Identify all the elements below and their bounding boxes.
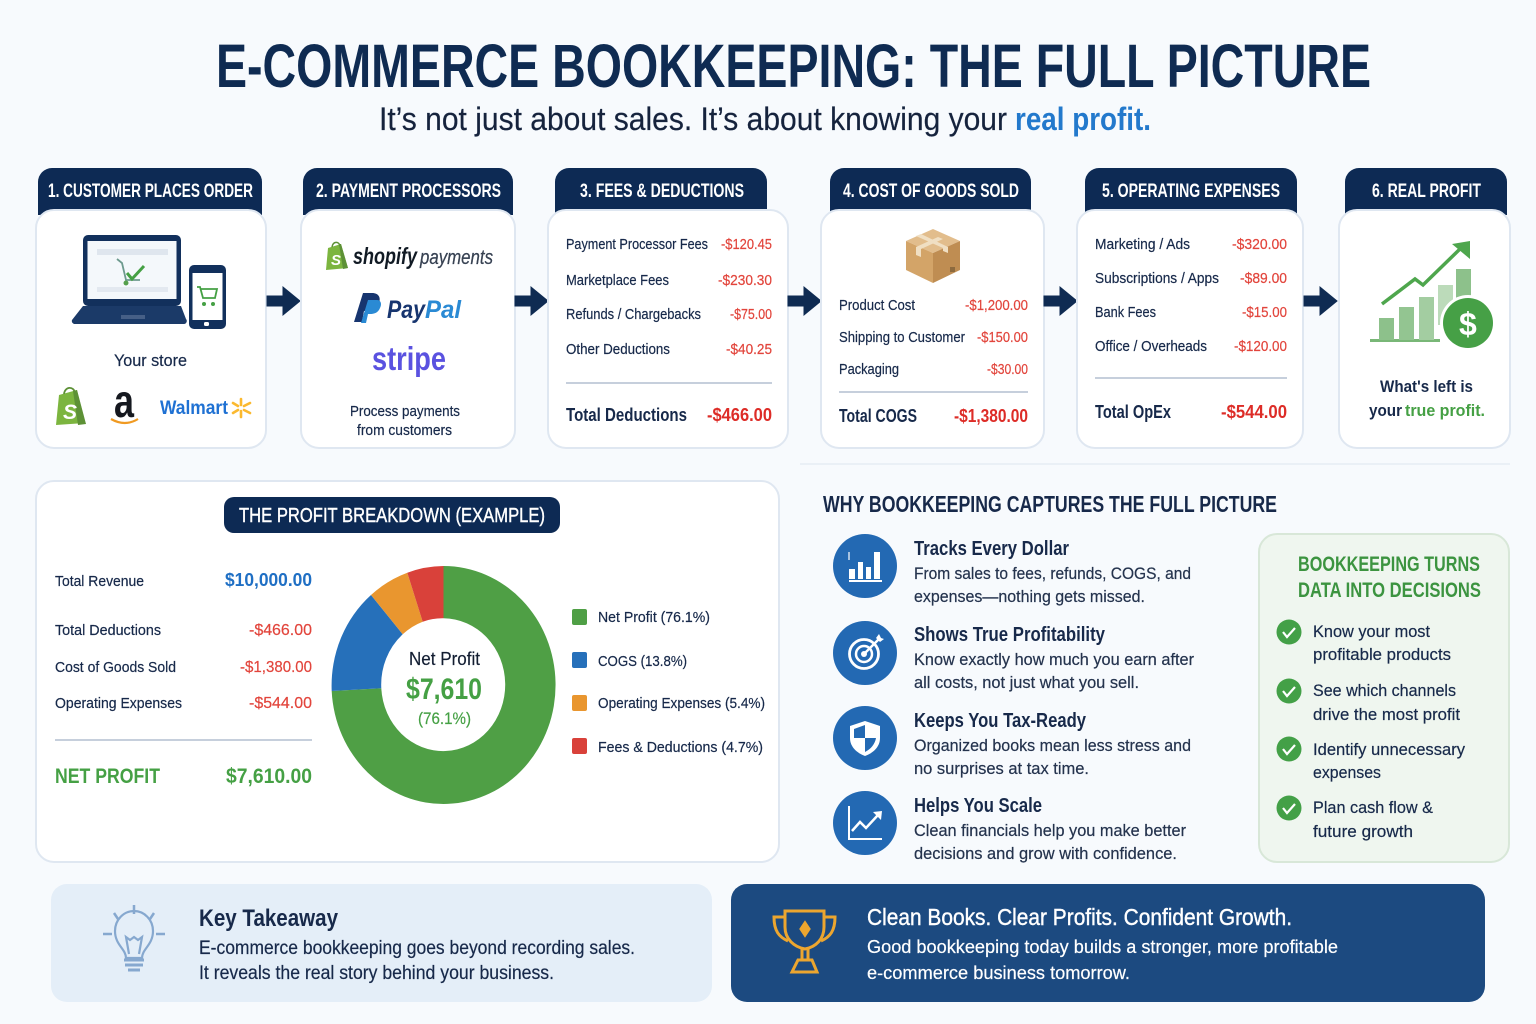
- text: process payments: from customers: [357, 423, 452, 439]
- benefit: shows true profitability: all costs, not just what you sell.: [914, 673, 1139, 692]
- logo: shopify payments: S: [331, 252, 341, 269]
- checklist item: channels: [1276, 678, 1460, 724]
- panel: step 2 payment processors: 2. PAYMENT PROCESSORS: [316, 181, 501, 202]
- panel: step 3 fees and deductions: -$75.00: [730, 307, 772, 323]
- panel: step 4 cost of goods sold: -$30.00: [987, 362, 1028, 378]
- panel: step 1 customer places order: 1. CUSTOMER PLACES ORDER: [48, 181, 253, 202]
- logo: paypal: Pal: [425, 296, 462, 324]
- panel: clean books: [731, 884, 1485, 1002]
- panel: step 6 real profit: [1339, 168, 1510, 448]
- panel: key takeaway: [51, 884, 712, 1002]
- panel: step 3 fees and deductions: 3. FEES & DEDUCTIONS: [580, 181, 744, 202]
- panel: bookkeeping turns data into decisions: DATA INTO DECISIONS: [1298, 579, 1481, 602]
- panel: step 5 operating expenses: -$120.00: [1234, 339, 1287, 355]
- panel: step 5 operating expenses: 5. OPERATING EXPENSES: [1102, 181, 1280, 202]
- legend: [572, 609, 765, 756]
- checklist item: profitable products: Know your most: [1313, 622, 1430, 641]
- table: breakdown figures: Total Deductions: [55, 623, 161, 639]
- panel: bookkeeping turns data into decisions: [1259, 534, 1509, 862]
- benefit: helps you scale: Clean financials help you make better: [914, 821, 1186, 840]
- benefit: keeps you tax-ready: no surprises at tax time.: [914, 759, 1089, 778]
- panel: step 4 cost of goods sold: Packaging: [839, 362, 899, 378]
- logo: walmart: Walmart: [160, 398, 229, 419]
- panel: key takeaway: It reveals the real story behind your business.: [199, 963, 554, 984]
- benefit: tracks every dollar: [833, 534, 1191, 606]
- panel: step 3 fees and deductions: Other Deductions: [566, 342, 670, 358]
- checklist item: profitable products: [1276, 620, 1451, 664]
- legend: COGS (13.8%): [598, 654, 687, 670]
- table: breakdown figures: $7,610.00: [226, 765, 312, 788]
- panel: step 4 cost of goods sold: -$1,380.00: [954, 406, 1028, 426]
- panel: step 5 operating expenses: -$15.00: [1242, 305, 1287, 321]
- panel: step 3 fees and deductions: Marketplace Fees: [566, 273, 669, 289]
- table: breakdown figures: Cost of Goods Sold: [55, 660, 176, 676]
- legend: Operating Expenses (5.4%): [598, 696, 765, 712]
- panel: key takeaway: E-commerce bookkeeping goes beyond recording sales.: [199, 938, 635, 959]
- panel: step 4 cost of goods sold: [821, 168, 1044, 448]
- logo: paypal: [354, 293, 462, 324]
- icon: shopify bag: [56, 388, 86, 425]
- benefit: keeps you tax-ready: Keeps You Tax-Ready: [914, 710, 1087, 732]
- panel: step 3 fees and deductions: -$230.30: [718, 273, 772, 289]
- panel: step 4 cost of goods sold: Shipping to Customer: [839, 330, 965, 346]
- heading: why bookkeeping: WHY BOOKKEEPING CAPTURES THE FULL PICTURE: [823, 491, 1277, 517]
- panel: step 5 operating expenses: Office / Overheads: [1095, 339, 1207, 355]
- donut chart: (76.1%): [418, 709, 471, 728]
- panel: step 3 fees and deductions: -$120.45: [721, 237, 772, 253]
- donut chart: $7,610: [406, 673, 482, 706]
- table: breakdown figures: [55, 570, 312, 788]
- panel: step 5 operating expenses: Marketing / Ads: [1095, 237, 1190, 253]
- benefit: keeps you tax-ready: [833, 706, 1191, 778]
- logo: paypal: Pay: [387, 296, 426, 324]
- panel: step 3 fees and deductions: Refunds / Chargebacks: [566, 307, 701, 323]
- checklist item: expenses: expenses: [1313, 763, 1381, 782]
- panel: step 5 operating expenses: -$544.00: [1221, 402, 1287, 422]
- panel: step 1 customer places order: [36, 168, 266, 448]
- arrow: [515, 287, 548, 315]
- panel: clean books: Good bookkeeping today builds a stronger, more profitable: [867, 937, 1338, 957]
- panel: step 5 operating expenses: -$89.00: [1240, 271, 1287, 287]
- icon: line chart: [833, 791, 897, 855]
- text: process payments: Process payments: [350, 404, 460, 420]
- table: breakdown figures: Operating Expenses: [55, 696, 182, 712]
- panel: step 5 operating expenses: [1077, 168, 1303, 448]
- checklist item: expenses: Identify unnecessary: [1313, 740, 1465, 759]
- panel: step 5 operating expenses: -$320.00: [1232, 237, 1287, 253]
- heading: profit breakdown: [224, 497, 560, 533]
- table: breakdown figures: -$544.00: [249, 695, 312, 712]
- icon: target: [833, 621, 897, 685]
- benefit: helps you scale: decisions and grow with confidence.: [914, 844, 1177, 863]
- benefit: shows true profitability: [833, 621, 1194, 692]
- benefit: tracks every dollar: expenses—nothing gets missed.: [914, 587, 1145, 606]
- benefit: shows true profitability: Know exactly how much you earn after: [914, 650, 1194, 669]
- text: true profit: your: [1369, 401, 1402, 420]
- arrow: [788, 287, 821, 315]
- text: true profit: [1369, 377, 1485, 420]
- text: true profit: What's left is: [1380, 377, 1473, 396]
- logo: stripe: stripe: [372, 340, 446, 377]
- checklist item: channels: drive the most profit: [1313, 705, 1460, 724]
- subtitle: real profit.: [1015, 101, 1151, 137]
- icon: laptop and phone: [72, 235, 226, 329]
- table: breakdown figures: $10,000.00: [225, 570, 312, 590]
- panel: step 6 real profit: 6. REAL PROFIT: [1372, 181, 1481, 202]
- benefit: shows true profitability: Shows True Profitability: [914, 624, 1106, 646]
- benefit: helps you scale: Helps You Scale: [914, 795, 1042, 817]
- icon: growth chart with dollar coin: $: [1459, 306, 1477, 342]
- arrow: [267, 287, 300, 315]
- panel: step 3 fees and deductions: [548, 168, 788, 448]
- logo: shopify payments: payments: [419, 247, 493, 269]
- panel: step 4 cost of goods sold: 4. COST OF GOODS SOLD: [843, 181, 1019, 202]
- table: breakdown figures: -$1,380.00: [240, 659, 312, 676]
- panel: profit breakdown: [36, 481, 779, 862]
- legend: Fees & Deductions (4.7%): [598, 740, 763, 756]
- table: breakdown figures: Total Revenue: [55, 574, 144, 590]
- panel: step 4 cost of goods sold: -$1,200.00: [965, 298, 1028, 314]
- icon: shopify bag: S: [63, 401, 77, 424]
- benefit: keeps you tax-ready: Organized books mean less stress and: [914, 736, 1191, 755]
- logo: shopify payments: shopify: [353, 243, 418, 269]
- panel: step 5 operating expenses: Total OpEx: [1095, 402, 1171, 422]
- panel: step 4 cost of goods sold: -$150.00: [977, 330, 1028, 346]
- checklist item: channels: See which channels: [1313, 681, 1456, 700]
- panel: step 5 operating expenses: Subscriptions / Apps: [1095, 271, 1219, 287]
- benefit: helps you scale: [833, 791, 1186, 863]
- panel: bookkeeping turns data into decisions: BOOKKEEPING TURNS: [1298, 553, 1480, 576]
- subtitle: It’s not just about sales. It’s about knowing your: [379, 101, 1007, 137]
- panel: step 2 payment processors: [301, 168, 515, 448]
- logo: shopify payments: [326, 242, 493, 270]
- checklist item: expenses: [1276, 736, 1465, 782]
- icon: cardboard box: [906, 229, 960, 283]
- benefit: tracks every dollar: Tracks Every Dollar: [914, 538, 1069, 560]
- panel: step 4 cost of goods sold: Total COGS: [839, 406, 917, 426]
- donut chart: Net Profit: [409, 649, 480, 669]
- icon: bar chart: [833, 534, 897, 598]
- icon: light bulb: [103, 905, 165, 970]
- arrow: [1044, 287, 1077, 315]
- checklist item: profitable products: profitable products: [1313, 645, 1451, 664]
- panel: key takeaway: Key Takeaway: [199, 905, 339, 932]
- panel: step 3 fees and deductions: Total Deductions: [566, 405, 687, 425]
- table: breakdown figures: NET PROFIT: [55, 765, 160, 788]
- panel: clean books: Clean Books. Clear Profits. Confident Growth.: [867, 904, 1292, 930]
- panel: clean books: e-commerce business tomorrow.: [867, 963, 1130, 983]
- donut chart: [332, 566, 556, 804]
- benefit: tracks every dollar: From sales to fees, refunds, COGS, and: [914, 564, 1191, 583]
- panel: step 5 operating expenses: Bank Fees: [1095, 305, 1156, 321]
- heading: profit breakdown: THE PROFIT BREAKDOWN (EXAMPLE): [239, 505, 545, 527]
- icon: growth chart with dollar coin: [1370, 241, 1496, 351]
- arrow: [1304, 287, 1337, 315]
- text: your store: Your store: [114, 351, 187, 370]
- text: true profit: true profit.: [1405, 401, 1485, 420]
- icon: amazon: a: [114, 375, 134, 427]
- panel: step 3 fees and deductions: -$40.25: [726, 342, 772, 358]
- checklist item: cash flow: Plan cash flow &: [1313, 798, 1434, 817]
- table: breakdown figures: -$466.00: [249, 622, 312, 639]
- text: process payments: [350, 404, 460, 439]
- checklist item: cash flow: [1276, 796, 1434, 841]
- checklist item: cash flow: future growth: [1313, 822, 1413, 841]
- panel: step 3 fees and deductions: -$466.00: [707, 405, 772, 425]
- icon: trophy: [774, 911, 835, 972]
- panel: step 3 fees and deductions: Payment Processor Fees: [566, 237, 708, 253]
- panel: step 4 cost of goods sold: Product Cost: [839, 298, 915, 314]
- icon: shield: [833, 706, 897, 770]
- legend: Net Profit (76.1%): [598, 610, 710, 626]
